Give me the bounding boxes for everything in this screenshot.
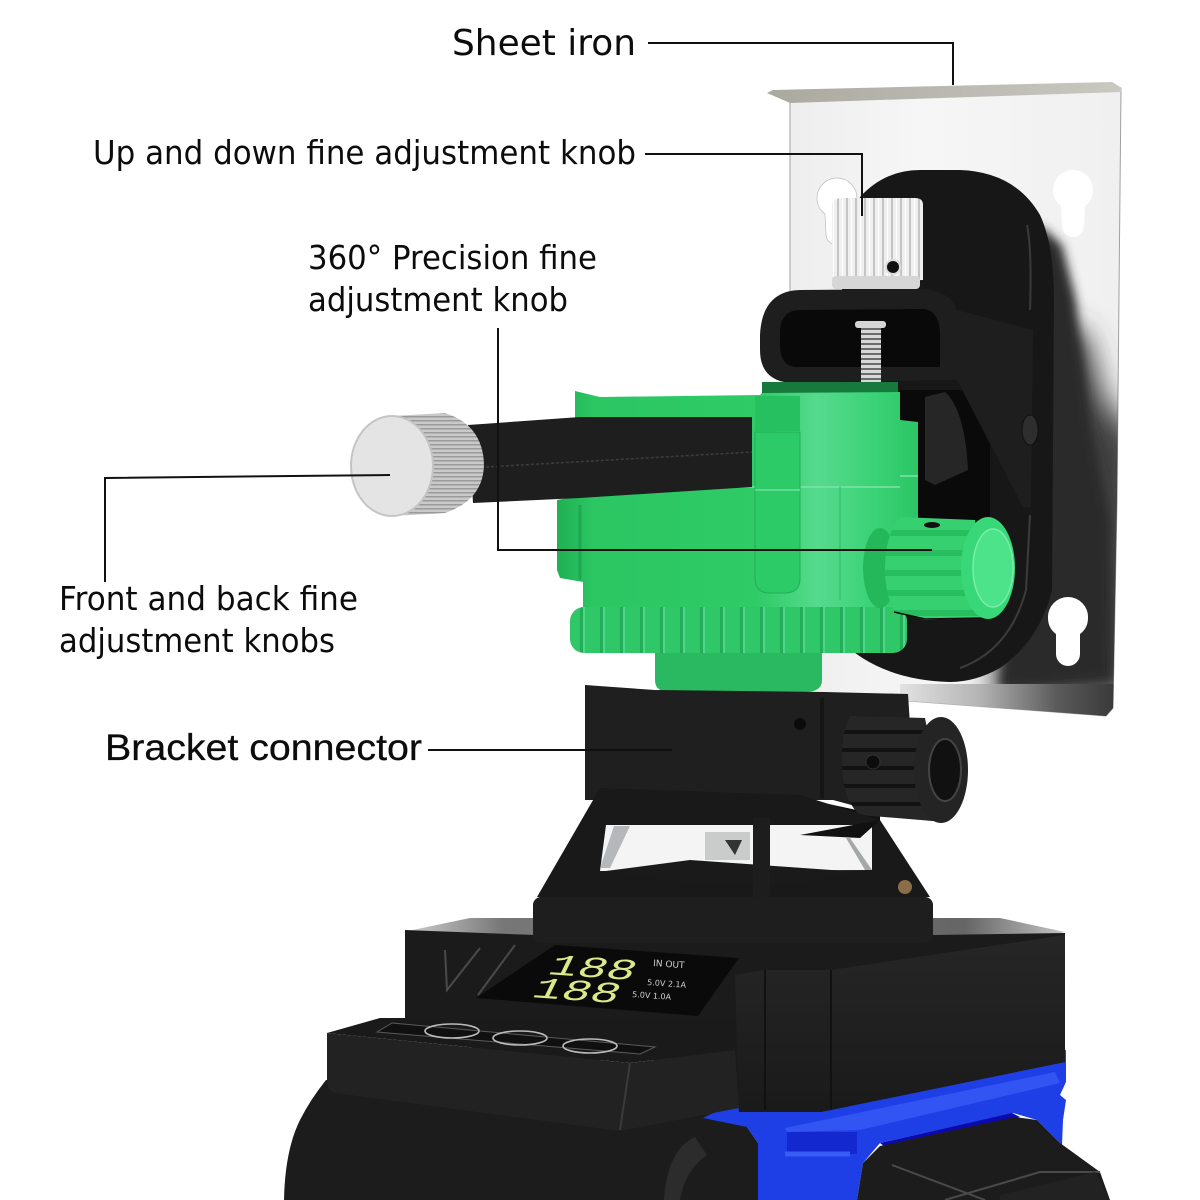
label: up and down fine adjustment knob: Up and down fine adjustment knob xyxy=(93,133,636,172)
panel: laser window housing xyxy=(537,788,930,916)
panel: battery display: 188 xyxy=(525,974,627,1012)
panel: black wall mount xyxy=(840,170,1054,682)
panel: battery display: IN OUT xyxy=(653,959,685,971)
panel: battery display xyxy=(476,945,739,1016)
panel: touch control bar xyxy=(327,1018,739,1131)
label: sheet iron: Sheet iron xyxy=(452,23,636,64)
label: 360 precision fine adjustment knob xyxy=(308,238,932,550)
icon: adjustment screw xyxy=(855,321,886,392)
label: up and down fine adjustment knob xyxy=(93,133,862,216)
panel: bracket connector xyxy=(585,685,968,840)
label: front and back fine adjustment knobs xyxy=(59,475,390,660)
label: 360 precision fine adjustment knob: adjustment knob xyxy=(308,280,568,319)
label: front and back fine adjustment knobs: Front and back fine xyxy=(59,579,358,618)
panel: laser main body xyxy=(403,897,1065,1112)
panel: battery display: 188 xyxy=(541,951,643,989)
label: bracket connector: Bracket connector xyxy=(105,727,422,768)
panel: battery display: 5.0V 2.1A xyxy=(647,978,687,990)
panel: battery body xyxy=(284,1080,758,1200)
icon: 360 precision fine adjustment knob xyxy=(863,517,1015,620)
panel: battery display: 5.0V 1.0A xyxy=(632,990,672,1002)
label: 360 precision fine adjustment knob: 360° Precision fine xyxy=(308,238,597,277)
panel: upper black bracket xyxy=(760,289,1038,507)
panel: sheet iron plate xyxy=(767,82,1140,720)
panel: blue battery housing xyxy=(703,1050,1066,1200)
icon: front and back fine adjustment knob with arm xyxy=(351,413,752,516)
label: sheet iron xyxy=(452,23,953,85)
label: front and back fine adjustment knobs: adjustment knobs xyxy=(59,621,335,660)
icon: up and down fine adjustment knob xyxy=(832,198,923,289)
panel: green adjustment body xyxy=(557,382,918,692)
panel: battery handle xyxy=(857,1117,1110,1200)
